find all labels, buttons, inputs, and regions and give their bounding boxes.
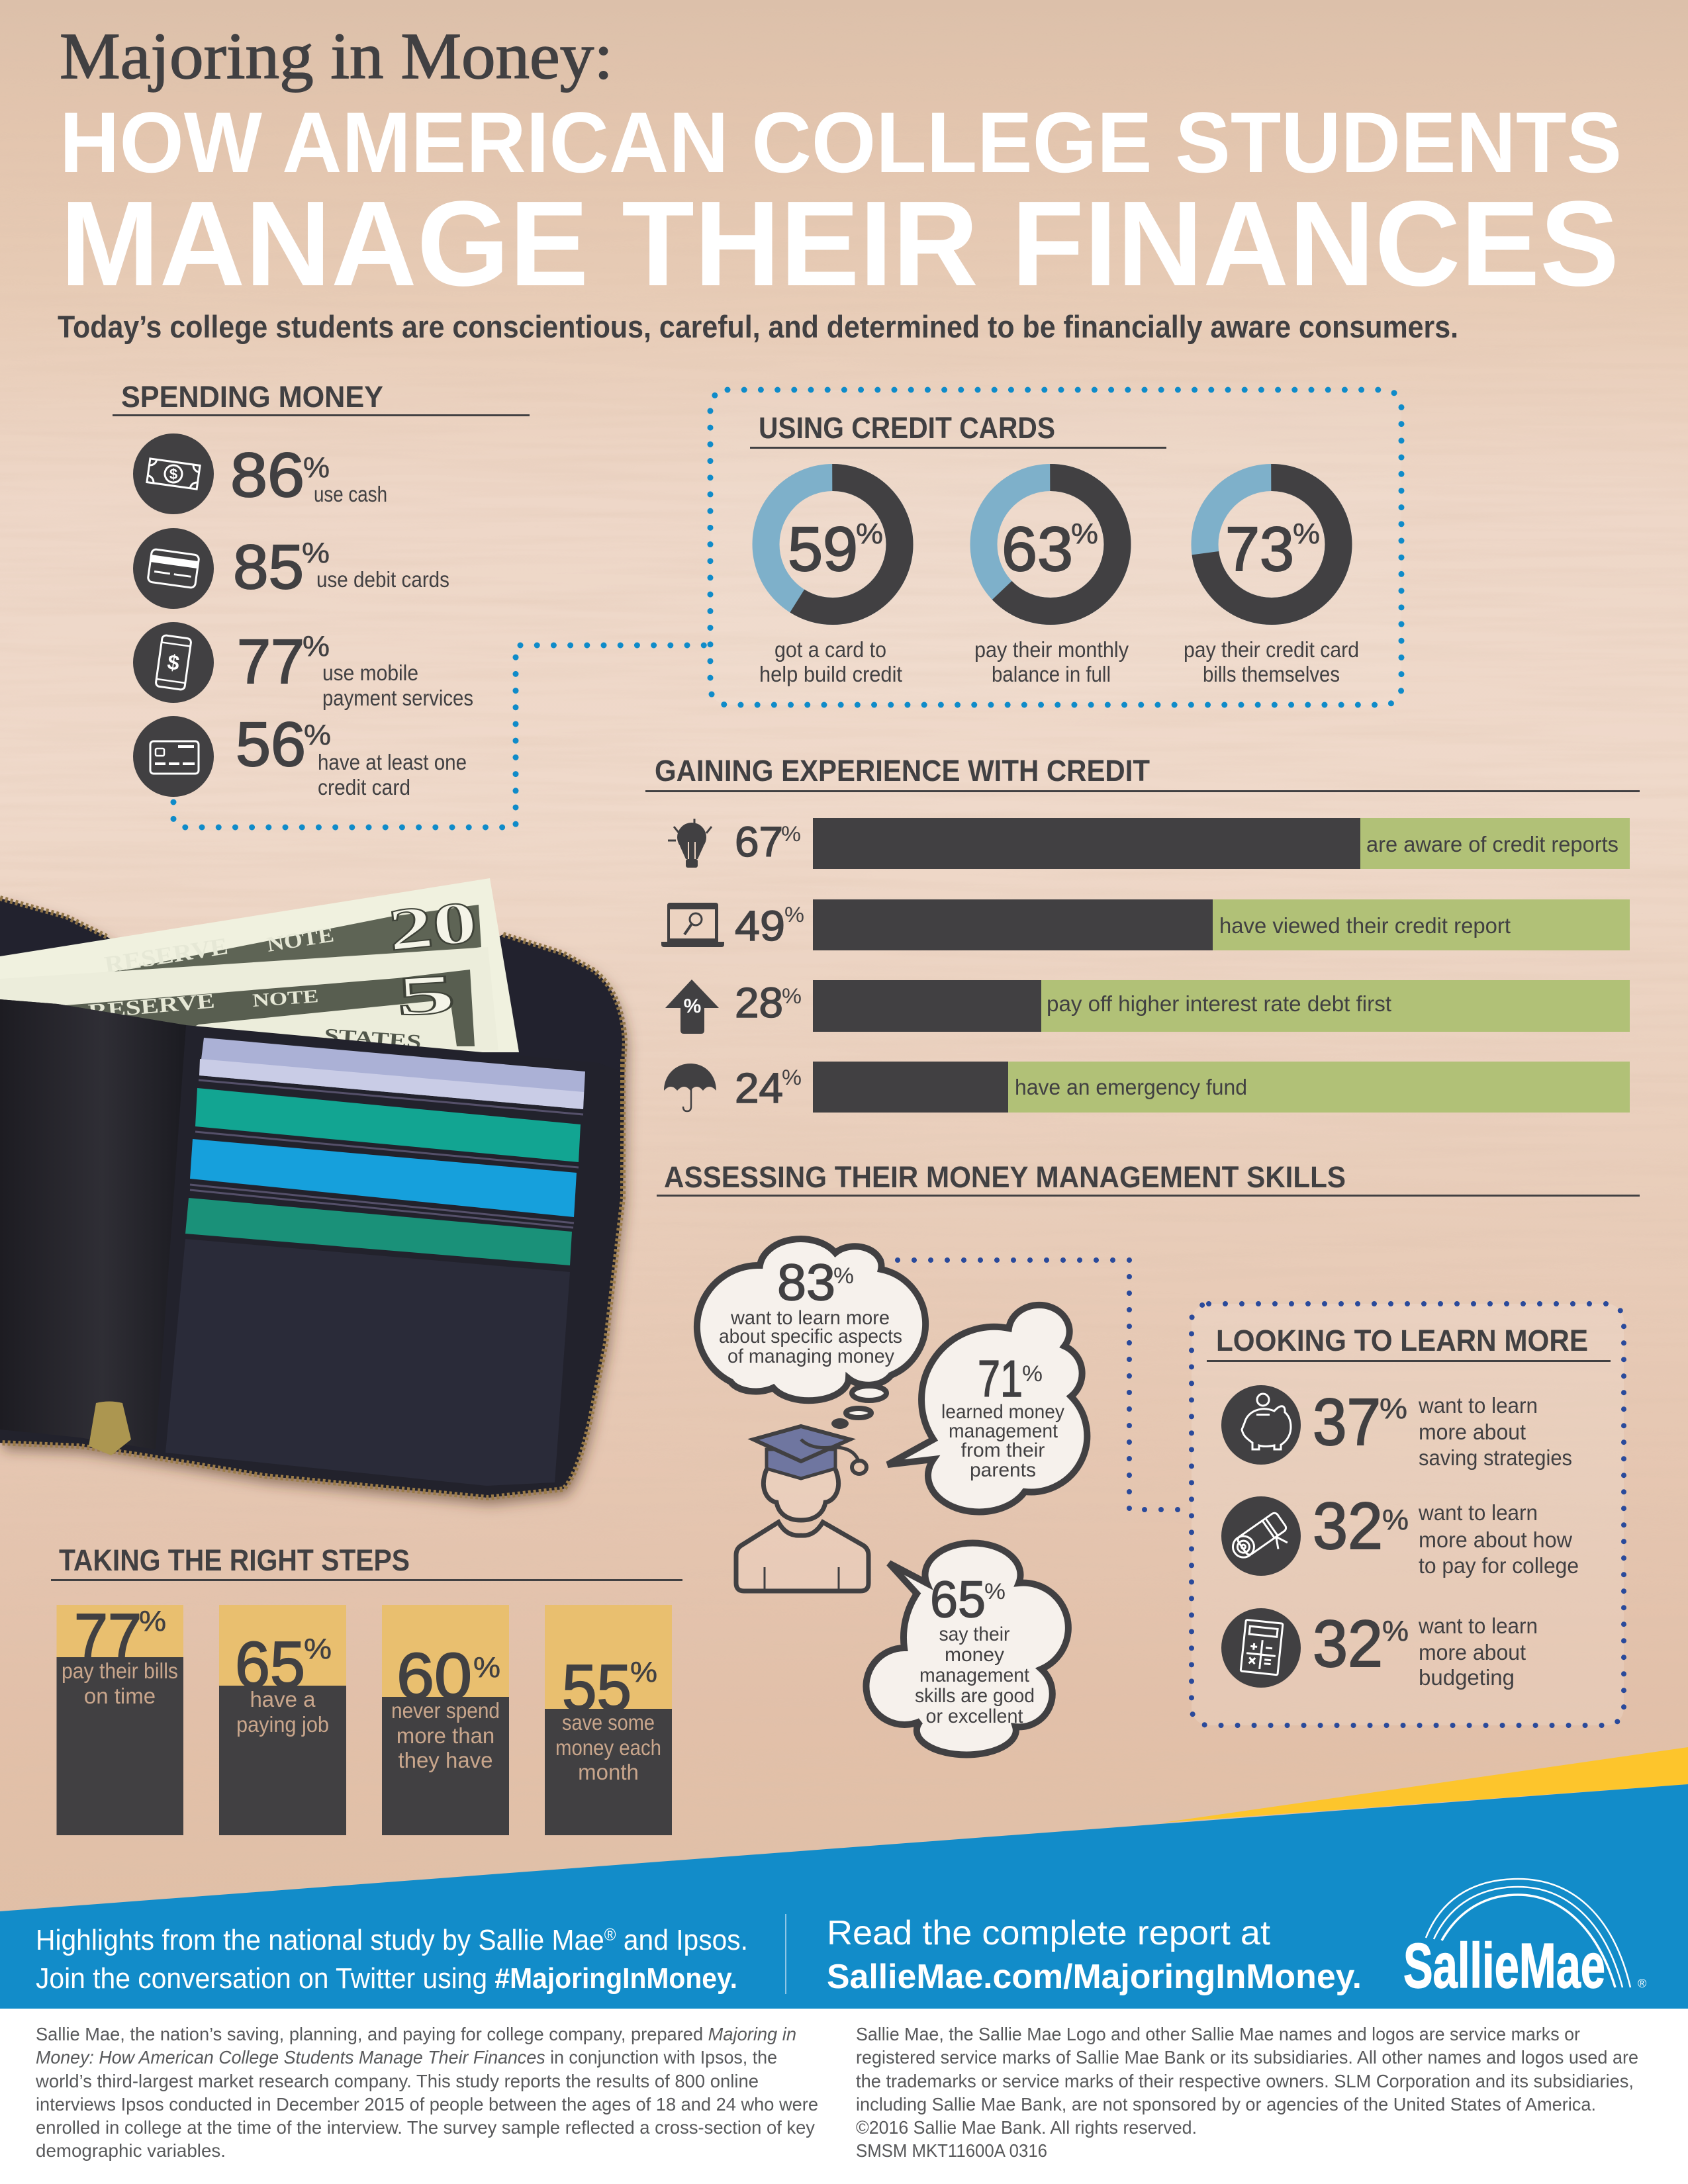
wallet lower pocket [165,1239,570,1486]
donut chart: 73%: bills themselves [1203,662,1340,686]
donut chart: 59%: % [856,518,883,550]
wallet zip pull [89,1402,131,1455]
bar: 65% [219,1605,346,1835]
speech bubble: 65%: say their [939,1623,1010,1645]
donut chart: 63%: 63 [1002,514,1073,584]
stat: 85% use debit cards: use debit cards [316,567,449,592]
subtitle: Today’s college students are conscientious, careful, and determined to be financially aware consumers. [58,309,1458,344]
stat: 32% budgeting: % [1382,1615,1409,1647]
speech bubble: 71% [888,1305,1087,1512]
icon: percent arrow [665,979,719,1034]
disclaimer: left column: Money: How American College Students Manage Their Finances in conjunction with Ipsos, the [36,2047,777,2068]
bar: 65%: % [304,1633,332,1665]
bar: 60% [382,1605,509,1835]
connector: dotted line to learn more [881,1260,1192,1510]
yellow accent wedge [1162,1747,1688,1823]
title line: How American College Students: HOW AMERICAN COLLEGE STUDENTS [60,94,1622,191]
bar: 77% [57,1600,183,1835]
bar row: 67%: 67 [735,818,783,866]
bar: 55%: month [578,1760,639,1784]
speech bubble: 65%: or excellent [925,1706,1023,1727]
bar row: 67%: are aware of credit reports [1366,832,1618,856]
thought bubble: 83%: % [833,1263,854,1289]
wallet pocket seams [190,1080,583,1228]
bar: 55%: money each [555,1735,661,1760]
stat: 32% budgeting: budgeting [1419,1665,1515,1690]
icon: light bulb [668,819,712,868]
stat: 56% have at least one credit card: 56 [236,709,306,780]
footer text: highlights: and Ipsos. [616,1924,748,1956]
icon: diploma [1221,1496,1301,1576]
disclaimer: left column: demographic variables. [36,2140,226,2161]
heading: looking to learn more: LOOKING TO LEARN MORE [1216,1324,1588,1357]
bar row: 49%: % [784,903,804,927]
icon: umbrella [664,1064,716,1111]
footer text: url: SallieMae.com/MajoringInMoney. [827,1958,1362,1996]
stat: 77% mobile payment services: payment services [322,686,473,710]
bar row: 24%: 24 [735,1064,783,1112]
stat: 85% use debit cards: % [302,537,330,569]
footer text: read the report: Read the complete report at [827,1914,1271,1952]
stat: 37% saving strategies [1313,1385,1572,1470]
dollar bills: NOTE [265,922,336,956]
stat: 32% pay for college [1313,1489,1579,1578]
stat: 77% mobile payment services: 77 [237,627,305,697]
icon: cash [133,433,214,514]
donut chart: 73%: 73 [1225,514,1294,584]
dollar bills: NOTE [252,986,319,1011]
panel: taking the right steps [51,1543,682,1835]
wallet zipper [0,1059,623,1498]
bar: 55%: % [630,1656,657,1688]
icon: cash: $ [169,466,177,482]
footer band: blue [0,1784,1688,2009]
dollar bills: 20 [385,889,480,964]
disclaimer: left column [35,2024,818,2161]
icon: mobile payment [133,622,214,703]
footer text: twitter: Join the conversation on Twitter using #MajoringInMoney. [36,1962,737,1995]
donut chart: 63% [974,478,1129,686]
bar: 77%: on time [84,1684,156,1708]
donut chart: 59%: help build credit [759,662,902,686]
bar: 55%: save some [562,1710,655,1735]
speech bubble: 65%: money [945,1644,1004,1666]
panel: looking to learn more [1192,1304,1624,1725]
thought bubble: 83%: about specific aspects [719,1326,902,1347]
bar row: 24%: have an emergency fund [1015,1075,1247,1099]
speech bubble: 71%: parents [970,1459,1036,1481]
panel: using credit cards [710,390,1401,705]
stat: 32% budgeting: 32 [1313,1607,1383,1681]
thought bubble: 83%: of managing money [727,1345,894,1367]
title line: Manage Their Finances: MANAGE THEIR FINANCES [60,175,1619,311]
icon: calculator [1221,1608,1301,1688]
dollar bills: STATES [324,1024,422,1053]
stat: 86% use cash: % [303,451,330,484]
stat: 37% saving strategies: saving strategies [1419,1445,1572,1470]
icon: student with graduation cap [736,1426,868,1591]
donut chart: 63%: balance in full [992,662,1111,686]
bar: 60%: more than [397,1723,494,1748]
dollar bills [0,878,519,1053]
bar: 77%: pay their bills [62,1659,178,1683]
icon: laptop with magnifier [661,903,724,947]
dollar bills: RESERVE [103,933,230,978]
footer text: highlights: ® [604,1925,616,1944]
stat: 56% have at least one credit card: % [304,719,331,751]
speech bubble: 65%: 65 [930,1570,986,1628]
heading: spending money: SPENDING MONEY [121,380,383,414]
speech bubble: 71%: learned money [941,1401,1064,1423]
logo: Sallie Mae: ® [1638,1977,1646,1990]
title: Majoring in Money: Majoring in Money: [60,19,613,93]
card: teal [195,1088,581,1162]
disclaimer: left column: interviews Ipsos conducted in December 2015 of people between the ages of 18 and 24 who were [36,2094,818,2115]
thought bubble: 83% [697,1239,925,1400]
thought bubble: 83%: 83 [777,1253,835,1311]
stat: 37% saving strategies: 37 [1313,1385,1381,1459]
stat: 37% saving strategies: more about [1419,1420,1526,1444]
heading: taking the right steps: TAKING THE RIGHT STEPS [59,1543,410,1577]
icon: debit card [133,528,214,609]
stat: 32% budgeting: more about [1419,1640,1526,1664]
disclaimer: right column: Sallie Mae, the Sallie Mae Logo and other Sallie Mae names and logos are service marks or [856,2024,1580,2044]
stat: 32% budgeting: want to learn [1418,1614,1538,1638]
bar: 65%: have a [250,1687,316,1711]
bar row: 28%: % [782,984,802,1008]
stat: 32% pay for college: 32 [1313,1489,1383,1563]
bar: 55% [545,1605,672,1835]
bar row: 24% [664,1062,1630,1113]
stat: 85% use debit cards [233,532,449,602]
disclaimer: left column: world’s third-largest market research company. This study reports the results of 800 online [35,2071,759,2091]
card: blue [190,1139,577,1217]
stat: 56% have at least one credit card: have at least one [318,750,467,774]
disclaimer: right column: ©2016 Sallie Mae Bank. All rights reserved. [856,2117,1197,2138]
bar row: 49%: have viewed their credit report [1219,913,1511,938]
panel: assessing their money management skills [657,1160,1640,1754]
donut chart: 63%: % [1071,518,1098,550]
bar: 77%: 77 [74,1600,142,1673]
dollar bills: 5 [395,963,457,1028]
disclaimer: right column [856,2024,1638,2161]
stat: 32% pay for college: to pay for college [1419,1553,1579,1578]
wallet folded panel [0,999,186,1449]
dollar bills: RESERVE [87,988,216,1023]
bar: 60%: 60 [397,1639,472,1712]
icon: credit card [133,716,214,797]
bar row: 49% [661,899,1630,950]
stat: 37% saving strategies: want to learn [1418,1393,1538,1418]
bar: 60%: % [473,1651,500,1684]
donut chart: 73% [1184,478,1359,686]
stat: 32% budgeting [1313,1607,1538,1690]
stat: 77% mobile payment services [237,627,473,710]
thought bubble: 83%: want to learn more [730,1307,890,1329]
speech bubble: 65%: % [984,1579,1006,1604]
wallet front pocket [0,999,623,1498]
bar: 60%: they have [398,1748,493,1772]
icon: percent arrow: % [684,995,701,1017]
stat: 85% use debit cards: 85 [233,532,304,602]
stat: 56% have at least one credit card: credit card [318,775,410,799]
wallet back [0,898,625,1498]
bar row: 28%: 28 [735,979,783,1026]
donut chart: 73%: % [1293,518,1320,550]
card: green [185,1198,572,1265]
speech bubble: 65%: skills are good [915,1685,1035,1707]
donut chart: 59%: got a card to [774,637,886,662]
wallet photo illustration [0,878,625,1498]
logo: Sallie Mae: SallieMae [1403,1931,1605,2001]
stat: 77% mobile payment services: use mobile [322,660,418,685]
stat: 86% use cash: use cash [314,482,387,506]
heading: assessing: ASSESSING THEIR MONEY MANAGEMENT SKILLS [664,1160,1346,1194]
bar: 77%: % [139,1605,166,1637]
disclaimer: right column: SMSM MKT11600A 0316 [856,2140,1047,2161]
disclaimer: left column: enrolled in college at the time of the interview. The survey sample reflected a cross-section of key [36,2117,815,2138]
icon: piggy bank [1221,1385,1301,1465]
speech bubble: 65%: management [919,1664,1030,1686]
speech bubble: 71%: management [949,1420,1058,1442]
panel: spending money [113,380,530,799]
bar row: 49%: 49 [735,902,785,950]
icon: mobile payment: $ [166,650,181,675]
panel: gaining experience with credit [645,754,1640,1113]
donut chart: 59% [759,478,902,686]
stat: 37% saving strategies: % [1380,1392,1407,1425]
speech bubble: 71%: 71 [978,1349,1023,1408]
card: lavender [199,1038,585,1109]
stat: 32% pay for college: more about how [1419,1527,1572,1552]
wallet zipper: top edges [0,898,625,1072]
disclaimer: right column: including Sallie Mae Bank, are not sponsored by or agencies of the United States of America. [856,2094,1596,2115]
bar row: 28%: pay off higher interest rate debt first [1047,991,1391,1016]
stat: 56% have at least one credit card [236,709,467,799]
footer text: highlights: Highlights from the national study by Sallie Mae [36,1924,649,1956]
bar row: 28% [665,979,1630,1034]
disclaimer: left column: Sallie Mae, the nation’s saving, planning, and paying for college company, prepared Majoring in [36,2024,796,2044]
stat: 32% pay for college: % [1382,1504,1409,1536]
bar row: 67% [668,818,1630,869]
donut chart: 73%: pay their credit card [1184,637,1359,662]
bar: 60%: never spend [391,1698,500,1723]
speech bubble: 65% [866,1543,1068,1754]
stat: 86% use cash: 86 [230,440,305,510]
heading: using credit cards: USING CREDIT CARDS [759,411,1055,445]
bar: 65%: paying job [236,1712,329,1737]
disclaimer: right column: registered service marks of Sallie Mae Bank or its subsidiaries. All other names and logos used are [856,2047,1638,2068]
connector: dotted line from spending to credit cards [173,645,705,827]
stat: 77% mobile payment services: % [303,630,330,662]
speech bubble: 71%: % [1022,1361,1043,1387]
logo: Sallie Mae [1403,1879,1646,2001]
speech bubble: 71%: from their [961,1439,1045,1461]
thought dots [831,1386,886,1429]
heading: gaining experience: GAINING EXPERIENCE WITH CREDIT [655,754,1150,788]
bar: 65%: 65 [235,1628,305,1701]
disclaimer: right column: the trademarks or service marks of their respective owners. SLM Corporation and its subsidiaries, [856,2071,1634,2091]
donut chart: 63%: pay their monthly [974,637,1129,662]
donut chart: 59%: 59 [788,514,858,584]
stat: 86% use cash [230,440,387,510]
bar: 55%: 55 [562,1651,632,1724]
bar row: 67%: % [781,822,801,846]
footer white panel [0,2009,1688,2184]
stat: 32% pay for college: want to learn [1418,1500,1538,1525]
bar row: 24%: % [782,1066,802,1089]
